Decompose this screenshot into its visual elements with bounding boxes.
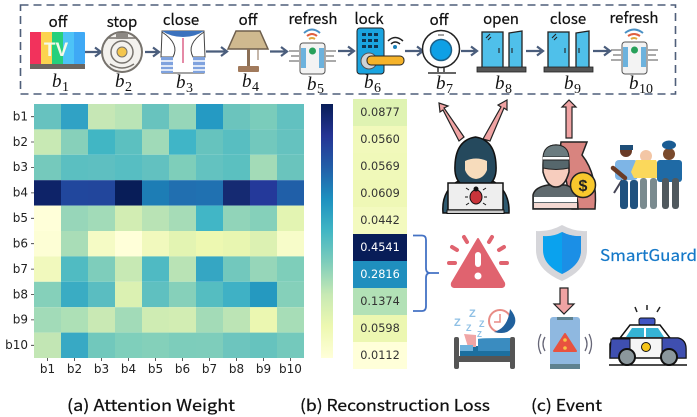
icon: open door (477, 31, 526, 72)
heatmap row and column tick labels: b2 (67, 362, 82, 376)
action labels: close (163, 9, 199, 30)
icon: air purifier (289, 30, 336, 74)
heatmap row and column tick labels: b9 (13, 312, 28, 326)
caption: (a) Attention Weight: (a) Attention Weight (67, 392, 235, 416)
icon: police arresting suspect (613, 140, 682, 209)
chart: reconstruction loss column: 0.0877 (360, 106, 400, 119)
icon: police car (609, 305, 687, 365)
heatmap row and column tick labels (5, 110, 302, 376)
heatmap row and column tick labels: b7 (13, 262, 28, 276)
behaviour symbols b1 to b10: 9 (574, 82, 581, 97)
action labels: open (483, 8, 519, 29)
icon: TV: TV (44, 40, 68, 61)
behaviour symbols b1 to b10: b (52, 71, 62, 92)
heatmap row and column tick labels: b8 (229, 362, 244, 376)
brace: anomalous items (413, 236, 439, 311)
icon: camera (422, 30, 460, 73)
behaviour symbols b1 to b10 (52, 71, 653, 97)
behaviour symbols b1 to b10: b (364, 72, 374, 93)
icon: phone alert (538, 317, 592, 369)
behaviour symbols b1 to b10: 3 (186, 81, 193, 96)
caption: (b) Reconstruction Loss: (b) Reconstruction Loss (300, 392, 490, 416)
icon: sleeping person in bed: Z (466, 323, 472, 333)
behaviour symbols b1 to b10: 5 (317, 82, 324, 97)
behaviour symbols b1 to b10: 7 (446, 82, 453, 97)
icon: sleeping person in bed (454, 308, 515, 369)
heatmap row and column tick labels: b6 (175, 362, 190, 376)
icon: sleeping person in bed: Z (454, 317, 461, 329)
dashed sequence frame (20, 5, 676, 94)
heatmap row and column tick labels: b2 (13, 135, 28, 149)
heatmap row and column tick labels: b10 (279, 362, 302, 376)
action labels: close (550, 8, 586, 29)
icon: sleeping person in bed: Z (477, 330, 482, 339)
behaviour symbols b1 to b10: b (176, 72, 186, 93)
behaviour symbols b1 to b10: b (564, 73, 574, 94)
heatmap row and column tick labels: b7 (202, 362, 217, 376)
icon: TV (30, 32, 85, 69)
action labels: refresh (610, 7, 658, 28)
heatmap row and column tick labels: b4 (121, 362, 136, 376)
chart: reconstruction loss column: 0.0560 (360, 133, 400, 146)
chart: reconstruction loss column: 0.0569 (360, 160, 400, 173)
behaviour symbols b1 to b10: b (307, 74, 316, 95)
heatmap row and column tick labels: b1 (40, 362, 55, 376)
chart: attention weight heatmap (34, 104, 304, 358)
heatmap row and column tick labels: b3 (13, 160, 28, 174)
action labels: off (49, 11, 69, 32)
arrow: shield to phone (554, 288, 574, 314)
icon: smart lock (357, 28, 404, 74)
chart: reconstruction loss column: 0.1374 (360, 295, 400, 308)
icon: thief with money bag: $ (579, 178, 588, 195)
icon: table lamp (228, 31, 268, 72)
behaviour symbols b1 to b10: b (242, 71, 252, 92)
icon: closed door (544, 31, 593, 72)
icon: alert warning triangle (449, 237, 507, 287)
chart: reconstruction loss column: 0.0112 (360, 349, 400, 362)
behaviour symbols b1 to b10: b (436, 73, 446, 94)
heatmap row and column tick labels: b5 (148, 362, 163, 376)
action labels: refresh (289, 8, 337, 29)
icon: air purifier second (611, 30, 658, 74)
action labels: off (239, 9, 259, 30)
chart: reconstruction loss column: 0.2816 (360, 268, 400, 281)
heatmap row and column tick labels: b1 (13, 110, 28, 124)
icon: SmartGuard shield (536, 225, 587, 281)
icon: sleeping person in bed: Z (479, 319, 485, 329)
sequence arrows (85, 46, 610, 56)
heatmap row and column tick labels: b10 (5, 338, 28, 352)
action labels: stop (107, 11, 137, 32)
heatmap row and column tick labels: b6 (13, 236, 28, 250)
chart: reconstruction loss column: 0.0442 (360, 214, 400, 227)
icon: hacker with arrows (439, 100, 509, 214)
behaviour symbols b1 to b10: b (115, 71, 124, 92)
heatmap row and column tick labels: b5 (13, 211, 28, 225)
panel: device action sequence (20, 5, 676, 97)
behaviour symbols b1 to b10: 10 (639, 82, 653, 97)
label: SmartGuard: SmartGuard (600, 242, 697, 266)
chart: reconstruction loss column: 0.0609 (360, 187, 400, 200)
icon: sleeping person in bed: Z (469, 308, 476, 320)
behaviour symbols b1 to b10: 1 (62, 80, 69, 95)
behaviour symbols b1 to b10: 8 (505, 82, 512, 97)
colorbar (321, 104, 333, 358)
chart: reconstruction loss column: 0.0598 (360, 322, 400, 335)
behaviour symbols b1 to b10: 2 (125, 80, 132, 95)
icon: robot vacuum (102, 32, 142, 72)
behaviour symbols b1 to b10: b (629, 73, 638, 94)
icon: thief with money bag (533, 100, 596, 209)
action labels: off (430, 9, 450, 30)
behaviour symbols b1 to b10: b (495, 73, 504, 94)
action labels (49, 7, 658, 32)
heatmap row and column tick labels: b4 (13, 186, 28, 200)
icon: curtain (161, 31, 205, 73)
caption: (c) Event: (c) Event (531, 392, 602, 416)
chart: reconstruction loss column: 0.4541 (360, 241, 400, 254)
behaviour symbols b1 to b10: 6 (374, 81, 381, 96)
heatmap row and column tick labels: b8 (13, 288, 28, 302)
chart: reconstruction loss column (353, 99, 407, 369)
heatmap row and column tick labels: b3 (94, 362, 109, 376)
heatmap row and column tick labels: b9 (256, 362, 271, 376)
action labels: lock (354, 8, 384, 29)
behaviour symbols b1 to b10: 4 (252, 80, 259, 95)
